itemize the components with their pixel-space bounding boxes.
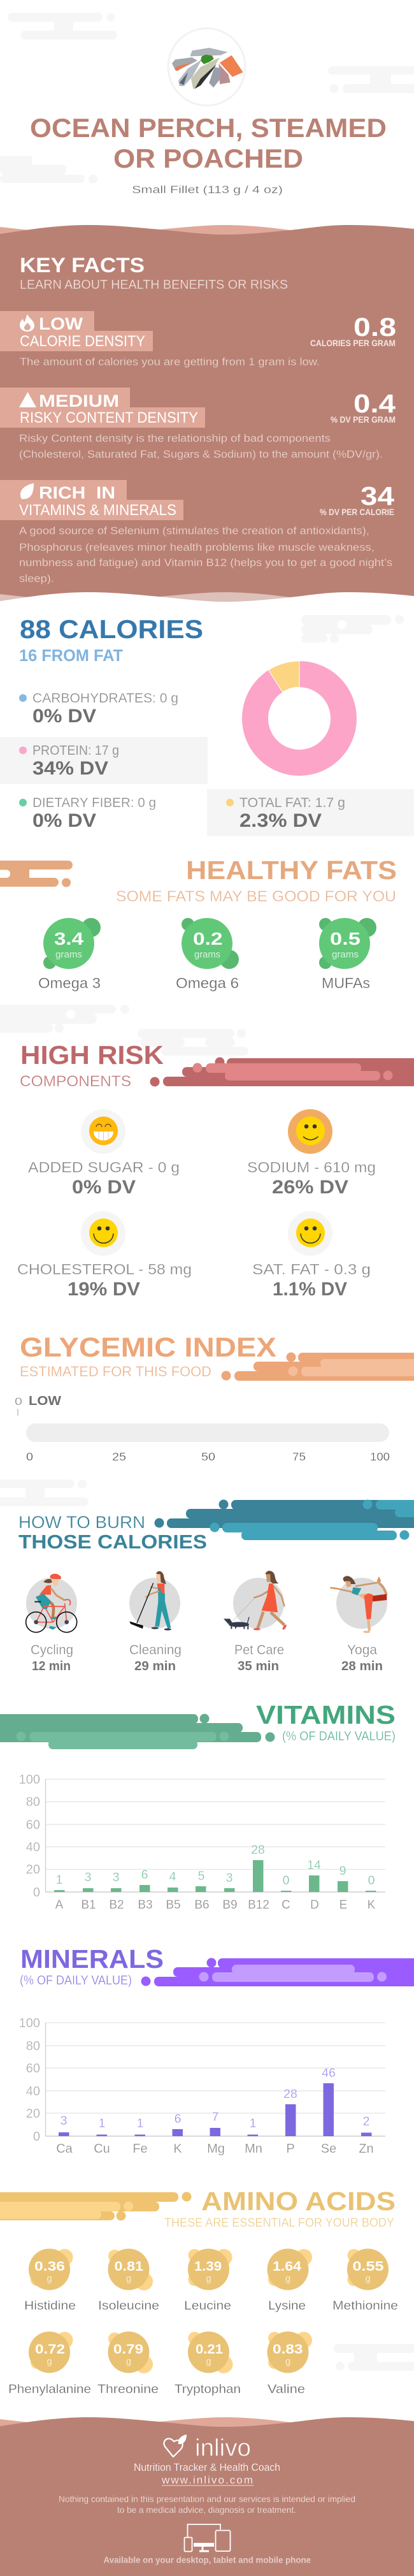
macro: carbohydrates: CARBOHYDRATES: 0 g [32, 691, 178, 706]
bar chart: vitamins: B5 [166, 1898, 181, 1912]
bar chart: vitamins: 5 [198, 1869, 205, 1883]
subheading: THESE ARE ESSENTIAL FOR YOUR BODY [164, 2216, 394, 2230]
bar chart: minerals: Se [321, 2142, 336, 2156]
description: (Cholesterol, Saturated Fat, Sugars & Sodium) to the amount (%DV/gr). [19, 448, 383, 460]
label: yoga: Yoga [347, 1643, 377, 1657]
gauge scale: 0 [26, 1450, 33, 1463]
bar chart: vitamins: 28 [251, 1843, 265, 1857]
amino: tryptophan: Tryptophan [175, 2382, 241, 2396]
label: medium: MEDIUM [39, 391, 119, 411]
bar chart: minerals: 28 [283, 2087, 297, 2101]
unit: % DV per gram: % DV PER GRAM [331, 414, 396, 425]
marker: low: LOW [29, 1394, 61, 1408]
subheading: SOME FATS MAY BE GOOD FOR YOU [116, 888, 396, 905]
label: rich in: RICH IN [39, 483, 115, 502]
bar chart: vitamins: A [55, 1898, 64, 1912]
value: 0.4: 0.4 [353, 389, 396, 418]
band: total fat [207, 789, 414, 836]
amino: isoleucine: Isoleucine [98, 2299, 159, 2313]
gauge scale: 100 [370, 1450, 390, 1463]
macro: dietary fiber: 0% DV [32, 810, 96, 831]
bar chart: minerals: 0 [33, 2130, 40, 2144]
badge: omega 3 [38, 918, 101, 991]
label: pet care: Pet Care [234, 1643, 284, 1657]
gauge scale: 50 [201, 1450, 215, 1463]
badge: omega 3: Omega 3 [38, 975, 101, 991]
amino: methionine [332, 2249, 398, 2313]
amino: tryptophan: 0.21 [196, 2342, 223, 2357]
panel: glycemic index [15, 1332, 414, 1463]
bar chart: minerals: Zn [359, 2142, 374, 2156]
bar chart: vitamins: B2 [109, 1898, 124, 1912]
description: numbness and fatigue) and Vitamin B12 (helps you to get a good night’s [19, 557, 392, 569]
heading: how to burn: HOW TO BURN [18, 1513, 145, 1532]
bottom wave [0, 592, 414, 609]
badge: MUFAs [319, 918, 376, 991]
label: vitamins and minerals: VITAMINS & MINERALS [19, 502, 176, 519]
description [19, 432, 383, 460]
bar chart: minerals: Cu [94, 2142, 110, 2156]
heading: key facts: KEY FACTS [20, 254, 145, 277]
badge: omega 6 [176, 918, 239, 991]
amino: lysine: 1.64 [273, 2259, 301, 2274]
macro: dietary fiber: DIETARY FIBER: 0 g [32, 796, 156, 810]
description: Risky Content density is the relationship of bad components [19, 432, 331, 444]
bar chart: minerals: 100 [19, 2016, 40, 2030]
item: cholesterol: 19% DV [68, 1279, 140, 1300]
amino: isoleucine [98, 2249, 159, 2313]
bar chart: minerals: K [173, 2142, 182, 2156]
bar chart: vitamins: 20 [26, 1863, 40, 1877]
amino: valine: Valine [268, 2382, 305, 2396]
background cloud: burn [0, 1480, 89, 1506]
decoration: vitamins band [0, 1714, 275, 1749]
bar chart: minerals: Fe [132, 2142, 148, 2156]
subheading: (% OF DAILY VALUE) [282, 1729, 396, 1743]
value: 28 min: 28 min [341, 1659, 383, 1673]
amino: lysine: g [285, 2273, 290, 2284]
disclaimer: Nothing contained in this presentation and our services is intended or implied [59, 2494, 355, 2504]
bar chart: minerals: 6 [175, 2112, 181, 2126]
item: saturated fat: SAT. FAT - 0.3 g [252, 1261, 371, 1277]
fish illustration [172, 48, 243, 89]
heading: MINERALS [20, 1944, 164, 1974]
bar chart: minerals: 1 [250, 2116, 256, 2130]
bar chart: vitamins: 40 [26, 1840, 40, 1854]
marker: low: 0 [15, 1395, 22, 1408]
fact: rich in vitamins and minerals [0, 480, 394, 585]
amino: isoleucine: 0.81 [115, 2259, 143, 2274]
value: 29 min: 29 min [134, 1659, 176, 1673]
gauge track [26, 1423, 389, 1442]
heading: HEALTHY FATS [186, 855, 397, 885]
subheading: LEARN ABOUT HEALTH BENEFITS OR RISKS [20, 278, 288, 292]
icon: person in yoga pose [330, 1576, 387, 1633]
amino: phenylalanine: g [46, 2356, 52, 2367]
bar chart: vitamins: B12 [248, 1898, 269, 1912]
title: OR POACHED [113, 143, 303, 173]
subheading: 16 from fat: 16 FROM FAT [19, 646, 123, 665]
item: sodium: SODIUM - 610 mg [247, 1159, 376, 1175]
decoration: high risk band [150, 1057, 414, 1086]
amino: threonine [97, 2332, 159, 2396]
fact: low calorie density [0, 311, 396, 368]
decoration: glycemic band [222, 1353, 414, 1381]
description: A good source of Selenium (stimulates the creation of antioxidants), [19, 525, 369, 537]
amino: leucine: g [206, 2273, 211, 2284]
item: added sugar [28, 1109, 180, 1198]
panel: how to burn [18, 1499, 414, 1673]
item: added sugar: ADDED SUGAR - 0 g [28, 1159, 180, 1175]
gauge scale: 75 [292, 1450, 306, 1463]
background cloud: title left [0, 156, 97, 184]
amino: phenylalanine [8, 2332, 91, 2396]
bar chart: minerals: 46 [322, 2066, 336, 2080]
badge: omega 3: 3.4 [54, 929, 83, 949]
icon: flame [20, 314, 34, 331]
bar chart: vitamins: 6 [141, 1868, 148, 1882]
bar chart: vitamins: 9 [339, 1864, 346, 1878]
bar chart: vitamins: 80 [26, 1795, 40, 1809]
badge: MUFAs: 0.5 [330, 929, 360, 949]
image circle [168, 28, 245, 106]
badge: omega 6: grams [194, 949, 220, 960]
gauge scale [26, 1450, 390, 1463]
background cloud: amino [334, 2344, 414, 2371]
amino: phenylalanine: 0.72 [35, 2342, 65, 2357]
activity: cleaning [129, 1571, 182, 1673]
bar chart: minerals: 20 [26, 2107, 40, 2121]
bar chart: vitamins: 4 [169, 1870, 176, 1884]
description: sleep). [19, 572, 54, 585]
bar chart: vitamins: 1 [56, 1873, 62, 1887]
bar chart: vitamins: B3 [138, 1898, 153, 1912]
bar chart: vitamins: 100 [19, 1773, 40, 1787]
marker: low [15, 1394, 61, 1416]
amino: tryptophan: g [206, 2356, 211, 2367]
amino: methionine: 0.55 [353, 2259, 384, 2274]
availability note: Available on your desktop, tablet and mobile phone [103, 2556, 311, 2565]
badge: MUFAs: MUFAs [322, 975, 370, 991]
heading: 88 calories: 88 CALORIES [20, 615, 203, 644]
amino: methionine: Methionine [332, 2299, 398, 2313]
panel: footer [0, 2417, 414, 2576]
panel: minerals [19, 1944, 414, 2156]
value: 34: 34 [360, 481, 394, 511]
bar chart: minerals: 60 [26, 2062, 40, 2076]
bar chart: vitamins: 14 [307, 1858, 321, 1872]
subheading: ESTIMATED FOR THIS FOOD [20, 1364, 211, 1379]
bar chart: vitamins: 0 [33, 1886, 40, 1900]
amino: histidine: g [46, 2273, 52, 2284]
item: saturated fat: 1.1% DV [273, 1279, 347, 1300]
decoration: burn band [154, 1499, 414, 1540]
subheading: (% OF DAILY VALUE) [20, 1974, 132, 1988]
bar chart: minerals: 3 [61, 2114, 67, 2128]
icon: leaf [20, 483, 34, 499]
macro: dietary fiber [19, 796, 156, 831]
logo: inlivo [164, 2434, 251, 2462]
heading: HIGH RISK [20, 1040, 164, 1070]
macro: total fat: TOTAL FAT: 1.7 g [239, 796, 345, 810]
bar chart: vitamins: B9 [222, 1898, 238, 1912]
bar chart: vitamins: 60 [26, 1818, 40, 1832]
subheading: COMPONENTS [20, 1073, 131, 1090]
bar chart: minerals: Ca [56, 2142, 73, 2156]
badge: omega 6: 0.2 [193, 929, 223, 949]
panel: calories [0, 615, 414, 836]
activity: pet care [224, 1571, 287, 1673]
label: risky content density: RISKY CONTENT DENSITY [20, 409, 198, 426]
decoration: amino band [0, 2192, 191, 2221]
macro: carbohydrates [19, 691, 178, 727]
activity: cycling [26, 1574, 77, 1673]
description: Phosphorus (releaves minor health problems like muscle weakness, [19, 541, 375, 553]
unit: calories per gram: CALORIES PER GRAM [310, 338, 396, 348]
heading: VITAMINS [256, 1700, 396, 1729]
amino: histidine: Histidine [24, 2299, 76, 2313]
band: protein [0, 737, 208, 784]
badge: omega 6: Omega 6 [176, 975, 239, 991]
item: cholesterol: CHOLESTEROL - 58 mg [17, 1261, 192, 1277]
label: calorie density: CALORIE DENSITY [20, 333, 145, 350]
bar chart: minerals: Mn [245, 2142, 262, 2156]
macro: carbohydrates: 0% DV [32, 706, 96, 727]
badge: omega 3: grams [55, 949, 82, 960]
background cloud: calories [301, 615, 404, 643]
bar chart: minerals: 7 [212, 2110, 218, 2124]
background cloud: top right [328, 66, 414, 93]
icon: person walking dog [224, 1571, 287, 1631]
bar chart: vitamins: 0 [368, 1874, 375, 1888]
description: The amount of calories you are getting from 1 gram is low. [20, 356, 320, 368]
bar chart: vitamins [19, 1773, 385, 1912]
amino: leucine: Leucine [184, 2299, 231, 2313]
bar chart: vitamins: 3 [226, 1871, 232, 1885]
panel: high risk [17, 1040, 414, 1300]
background cloud: top left [8, 13, 117, 40]
bar chart: minerals: Mg [207, 2142, 225, 2156]
bar chart: vitamins: B6 [194, 1898, 210, 1912]
background cloud: above high risk right [138, 1029, 248, 1056]
bar chart: vitamins: E [339, 1898, 347, 1912]
bar chart: minerals: P [286, 2142, 295, 2156]
title: OCEAN PERCH, STEAMED [30, 113, 387, 143]
tagline: Nutrition Tracker & Health Coach [134, 2462, 280, 2473]
amino: leucine: 1.39 [194, 2259, 222, 2274]
bar chart: vitamins: K [368, 1898, 376, 1912]
item: cholesterol [17, 1211, 192, 1300]
donut chart [255, 661, 344, 762]
panel: amino acids [0, 2187, 398, 2396]
amino: phenylalanine: Phenylalanine [8, 2382, 91, 2396]
activity: yoga [330, 1576, 387, 1673]
macro: total fat: 2.3% DV [239, 810, 322, 831]
disclaimer [59, 2494, 355, 2515]
amino: valine [268, 2332, 312, 2396]
item: sodium: 26% DV [272, 1177, 348, 1198]
bar chart: minerals: 1 [99, 2116, 105, 2130]
bar chart: vitamins: 0 [283, 1874, 290, 1888]
heading: GLYCEMIC INDEX [20, 1332, 276, 1363]
amino: leucine [184, 2249, 232, 2313]
badge: MUFAs: grams [332, 949, 359, 960]
panel: vitamins [0, 1700, 396, 1912]
amino: threonine: 0.79 [113, 2342, 143, 2357]
disclaimer: to be a medical advice, diagnosis or treatment. [117, 2505, 296, 2515]
macro: protein [19, 743, 119, 779]
bar chart: minerals: 2 [363, 2114, 369, 2128]
amino: threonine: g [126, 2356, 131, 2367]
value: 35 min: 35 min [238, 1659, 279, 1673]
amino: isoleucine: g [126, 2273, 131, 2284]
serving size: Small Fillet (113 g / 4 oz) [132, 184, 283, 196]
label: low: LOW [39, 314, 83, 333]
bar chart: minerals [19, 2016, 385, 2156]
icon: warning triangle [19, 392, 36, 407]
bar chart: vitamins: 3 [113, 1870, 119, 1884]
item: added sugar: 0% DV [72, 1177, 136, 1198]
label: cycling: Cycling [31, 1643, 73, 1657]
amino: lysine [268, 2249, 312, 2313]
amino: histidine: 0.36 [34, 2259, 65, 2274]
amino: lysine: Lysine [268, 2299, 306, 2313]
decoration: healthy fats band [0, 861, 73, 887]
website link: www.inlivo.com [161, 2474, 253, 2486]
icon: person sweeping [129, 1571, 171, 1631]
item: saturated fat [252, 1211, 371, 1300]
bar chart: vitamins: D [310, 1898, 319, 1912]
macro: total fat [226, 796, 345, 831]
description [19, 525, 392, 585]
icon: cyclist [26, 1574, 77, 1633]
value: 0.8: 0.8 [353, 312, 396, 342]
decoration: minerals band [141, 1958, 414, 1986]
bar chart: vitamins: B1 [81, 1898, 96, 1912]
amino: methionine: g [365, 2273, 371, 2284]
unit: % DV per calorie: % DV PER CALORIE [320, 507, 394, 517]
logo: inlivo: inlivo [195, 2435, 251, 2462]
amino: threonine: Threonine [97, 2382, 159, 2396]
macro: protein: 34% DV [32, 758, 108, 779]
amino: valine: 0.83 [273, 2342, 303, 2357]
heading: AMINO ACIDS [201, 2187, 396, 2216]
title [30, 113, 387, 173]
amino: valine: g [285, 2356, 290, 2367]
food image: fish in circle [168, 28, 245, 106]
gauge scale: 25 [112, 1450, 126, 1463]
heading: those calories: THOSE CALORIES [18, 1531, 207, 1553]
fact: medium risky content density [0, 388, 396, 460]
top wave [0, 225, 414, 242]
bar chart: vitamins: C [282, 1898, 290, 1912]
footer wave [0, 2417, 414, 2434]
bar chart: minerals: 1 [137, 2116, 143, 2130]
bar chart: minerals: 40 [26, 2085, 40, 2099]
macro: protein: PROTEIN: 17 g [32, 743, 119, 758]
background cloud: above high risk left [0, 1005, 129, 1033]
amino: tryptophan [175, 2332, 241, 2396]
item: sodium [247, 1109, 376, 1198]
value: 12 min: 12 min [32, 1659, 71, 1673]
panel: healthy fats [0, 855, 397, 991]
bar chart: minerals: 80 [26, 2039, 40, 2053]
amino: histidine [24, 2249, 76, 2313]
icon: devices [185, 2524, 231, 2551]
panel: key facts [0, 225, 414, 609]
bar chart: vitamins: 3 [85, 1870, 91, 1884]
label: cleaning: Cleaning [129, 1643, 182, 1657]
